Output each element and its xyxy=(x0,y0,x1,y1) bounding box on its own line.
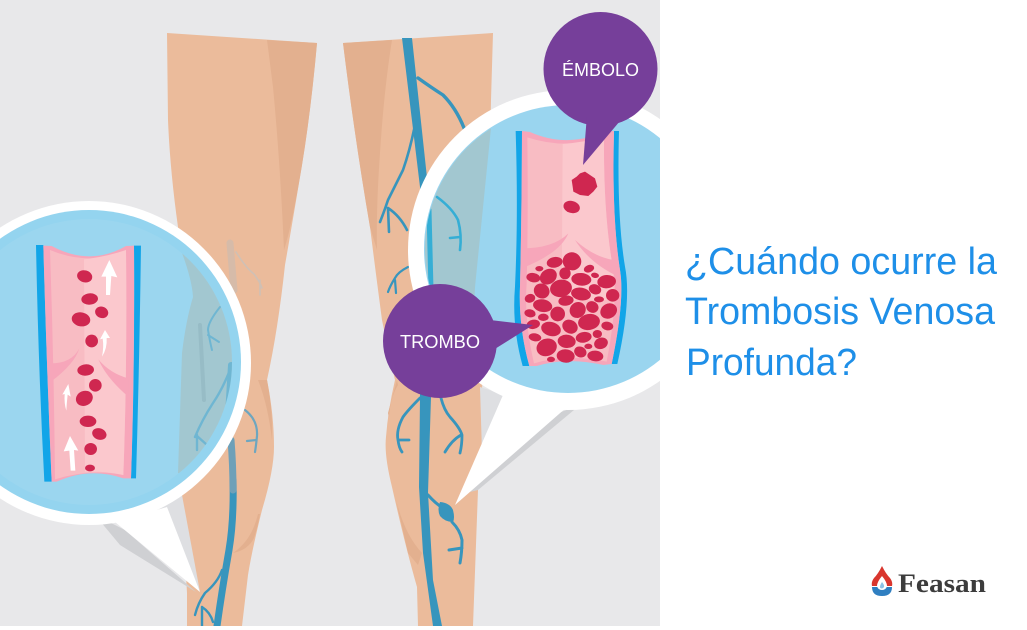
right callout tail xyxy=(455,387,580,505)
callout: ÉMBOLO xyxy=(544,12,658,165)
title: ¿Cuándo ocurre la xyxy=(685,241,998,283)
right leg vein branches xyxy=(380,78,464,563)
logo: Feasan: Feasan xyxy=(898,569,987,598)
magnified leg seen through lens xyxy=(178,254,232,473)
illustration panel background xyxy=(0,0,660,626)
right magnifier circle xyxy=(408,92,660,410)
flow arrows xyxy=(62,260,117,471)
title: Profunda? xyxy=(686,342,857,384)
varicose bulge xyxy=(438,502,454,522)
logo: Feasan xyxy=(872,566,987,598)
valves xyxy=(53,349,79,380)
thrombosed vein, drawn in 3x coordinates xyxy=(514,131,627,366)
faint veins on left leg xyxy=(230,243,262,295)
valves xyxy=(527,234,568,266)
callout: TROMBO xyxy=(383,284,533,398)
magnified leg seen through lens xyxy=(425,128,491,296)
left callout tail xyxy=(95,495,200,592)
title xyxy=(685,241,998,384)
right leg main vein xyxy=(402,38,442,626)
icon: drop xyxy=(872,566,892,596)
embolus xyxy=(562,172,597,215)
red blood cells xyxy=(71,269,110,471)
healthy vein xyxy=(36,245,141,482)
left vessel, drawn in 3x coordinates xyxy=(36,245,141,482)
thrombus red blood cells xyxy=(524,250,620,363)
callout: TROMBO: TROMBO xyxy=(400,332,480,352)
left magnifier circle xyxy=(0,201,260,525)
callout: ÉMBOLO: ÉMBOLO xyxy=(562,60,639,80)
left leg veins xyxy=(195,410,257,626)
left leg xyxy=(167,33,317,626)
right leg xyxy=(343,33,493,626)
title: Trombosis Venosa xyxy=(685,291,996,333)
